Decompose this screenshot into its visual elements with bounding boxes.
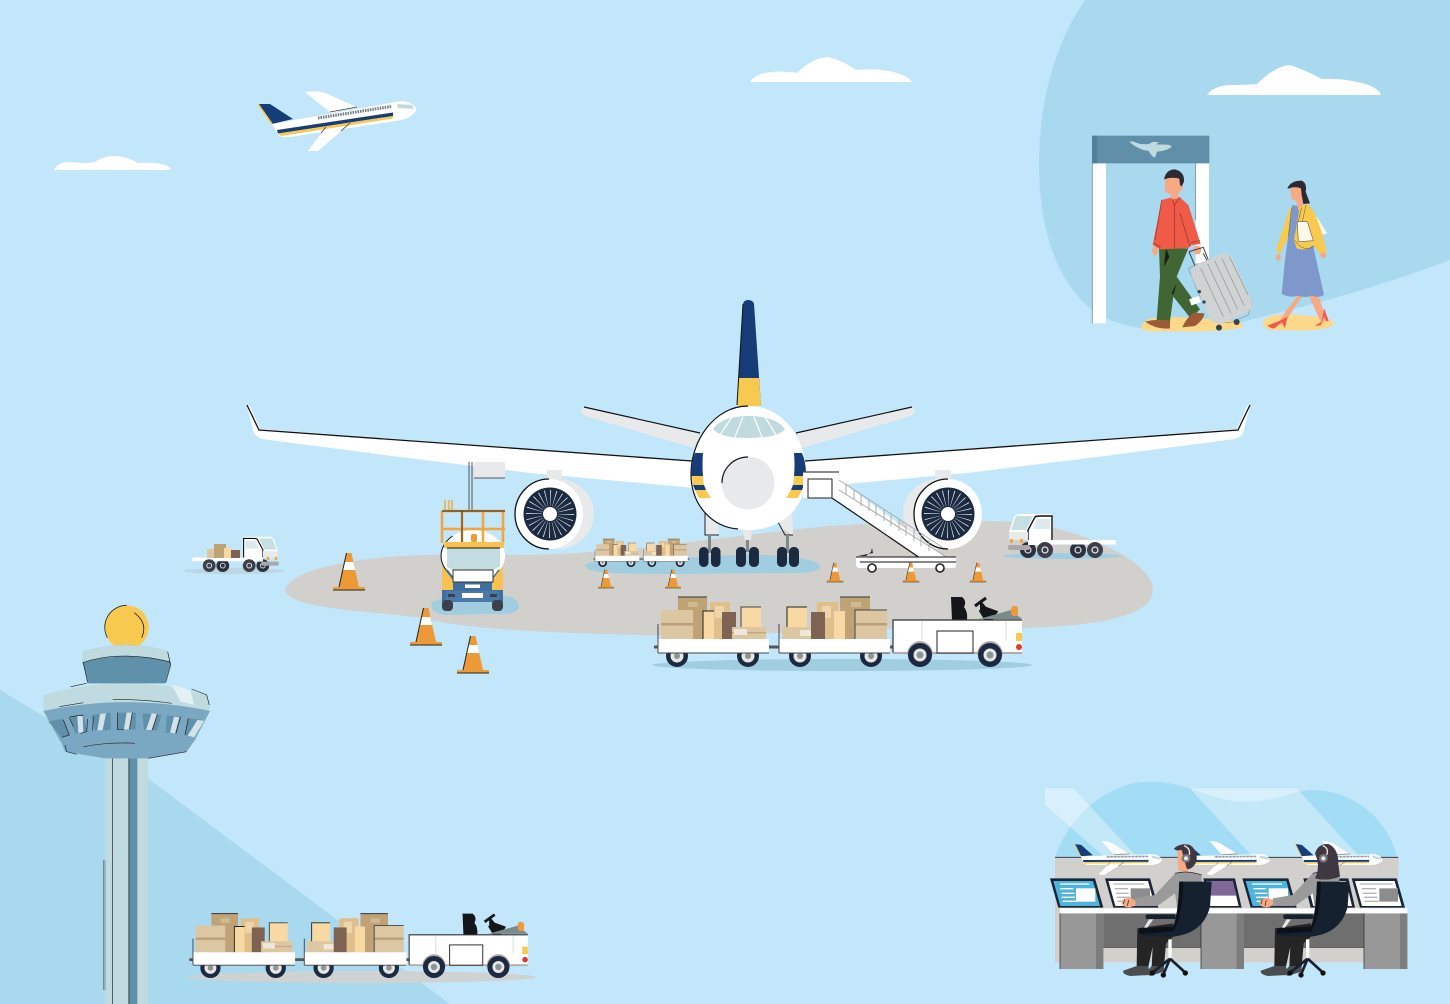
man with suitcase	[1145, 169, 1255, 331]
lift truck	[431, 500, 519, 615]
traffic cones	[333, 553, 986, 673]
boarding gate and passengers	[1092, 136, 1334, 331]
woman	[1267, 181, 1329, 329]
monitors	[1050, 878, 1405, 908]
operator: woman	[1259, 844, 1349, 978]
left stripes	[691, 453, 711, 498]
suitcase	[1188, 247, 1255, 331]
plane in flight	[258, 91, 416, 151]
control tower	[43, 605, 210, 1004]
cloud: centre	[750, 57, 912, 82]
window sky	[1055, 782, 1397, 857]
radome	[722, 456, 774, 510]
tower column	[103, 749, 148, 1004]
lift cage	[442, 500, 505, 543]
main cab	[43, 683, 210, 758]
planes outside	[1071, 837, 1384, 883]
light beams	[1045, 788, 1360, 857]
fin	[737, 300, 761, 406]
right stripes	[786, 453, 806, 498]
windshield	[713, 416, 785, 438]
baggage train: apron	[652, 597, 1032, 671]
gantry frame	[469, 462, 505, 512]
back wall	[1055, 857, 1398, 962]
landing gear	[699, 510, 799, 567]
left wing	[247, 405, 695, 488]
truck: right	[1002, 514, 1122, 559]
gate frame	[1092, 136, 1209, 323]
gear shadow	[585, 555, 820, 574]
upper cabin	[83, 645, 171, 683]
floor patches	[1141, 315, 1334, 331]
tailplanes	[581, 407, 915, 448]
sun sphere	[105, 605, 149, 649]
truck: left with cargo	[184, 537, 284, 574]
right wing	[802, 405, 1250, 488]
background shape: top right	[1039, 0, 1450, 330]
central aircraft	[247, 300, 1250, 574]
right engine	[903, 470, 982, 549]
control room	[1045, 782, 1407, 978]
small baggage carts	[593, 539, 689, 567]
windows	[48, 713, 204, 737]
cloud: left	[54, 156, 171, 170]
operator: man	[1122, 844, 1212, 978]
baggage train: lower left	[188, 914, 536, 983]
left engine	[515, 470, 594, 549]
apron	[285, 521, 1153, 636]
passenger stairs	[803, 472, 956, 572]
fuselage	[691, 406, 806, 530]
cloud: right	[1207, 65, 1381, 95]
desk	[1060, 913, 1407, 969]
desk top	[1060, 908, 1407, 913]
background shape: bottom left	[0, 690, 450, 1004]
gate plane icon	[1129, 141, 1171, 158]
